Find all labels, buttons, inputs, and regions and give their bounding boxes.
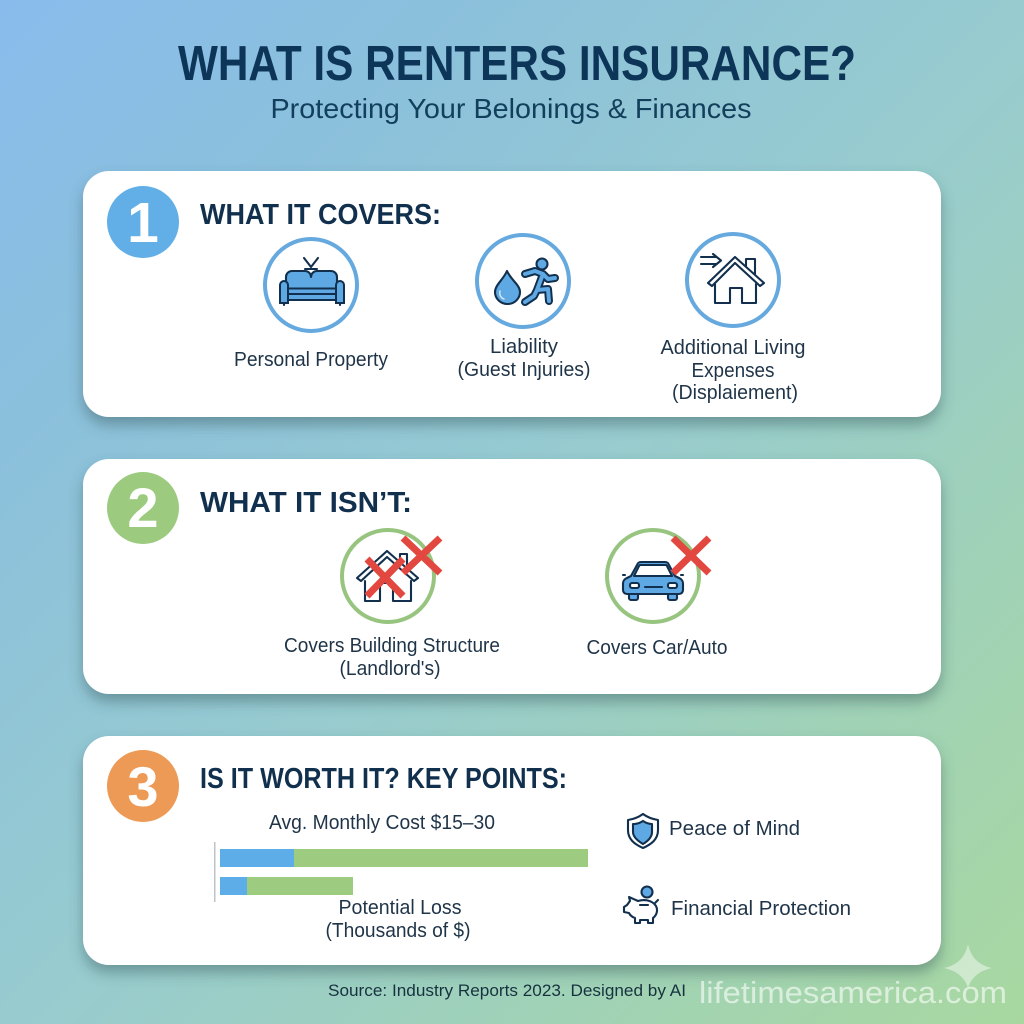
label: potential loss: Potential Loss — [338, 897, 462, 919]
label: personal property: Personal Property — [234, 349, 388, 371]
panel: is it worth it — [83, 736, 941, 965]
label: additional living expenses: Expenses — [692, 360, 774, 382]
heading: key points: IS IT WORTH IT? KEY POINTS: — [200, 763, 567, 795]
label: potential loss — [326, 897, 470, 942]
label: peace of mind: Peace of Mind — [669, 818, 800, 840]
icon: piggy bank with coin — [624, 886, 658, 923]
number badge 1: 1 — [127, 191, 159, 255]
label: covers building structure: Covers Building Structure — [284, 635, 500, 657]
number badge 1 — [107, 186, 179, 258]
label: additional living expenses: (Displaiement) — [672, 382, 798, 404]
label: additional living expenses — [660, 337, 806, 404]
icon: sofa and tv — [265, 239, 357, 331]
source note: Source: Industry Reports 2023. Designed by AI — [328, 981, 686, 1000]
heading: what it isn't: WHAT IT ISN’T: — [200, 487, 412, 519]
icon: shield — [628, 814, 658, 848]
label: liability: (Guest Injuries) — [458, 359, 590, 381]
label: liability — [458, 336, 590, 381]
icon: crossed-out car — [607, 530, 709, 622]
label: covers car/auto: Covers Car/Auto — [586, 637, 728, 659]
title: WHAT IS RENTERS INSURANCE? — [178, 37, 856, 91]
label: potential loss: (Thousands of $) — [326, 920, 470, 942]
number badge 3: 3 — [127, 755, 159, 818]
heading: what it covers: WHAT IT COVERS: — [200, 199, 441, 231]
label: covers building structure: (Landlord's) — [340, 658, 440, 680]
watermark sparkle — [944, 944, 992, 988]
icon: crossed-out house — [342, 530, 440, 622]
panel: what it isn't — [83, 459, 941, 694]
number badge 2 — [107, 472, 179, 544]
subtitle: Protecting Your Belonings & Finances — [270, 93, 752, 124]
label: average monthly cost: Avg. Monthly Cost $15–30 — [269, 812, 495, 834]
number badge 3 — [107, 750, 179, 822]
label: covers building structure — [284, 635, 500, 680]
number badge 2: 2 — [127, 476, 159, 539]
panel: what it covers — [83, 171, 941, 417]
icon: house with arrows — [687, 234, 779, 326]
watermark text: lifetimesamerica.com — [699, 975, 1007, 1010]
icon: water drop and running person — [477, 235, 569, 327]
bar chart — [214, 842, 588, 902]
label: additional living expenses: Additional Living — [660, 337, 806, 359]
label: liability: Liability — [490, 336, 558, 358]
label: financial protection: Financial Protection — [671, 898, 851, 920]
